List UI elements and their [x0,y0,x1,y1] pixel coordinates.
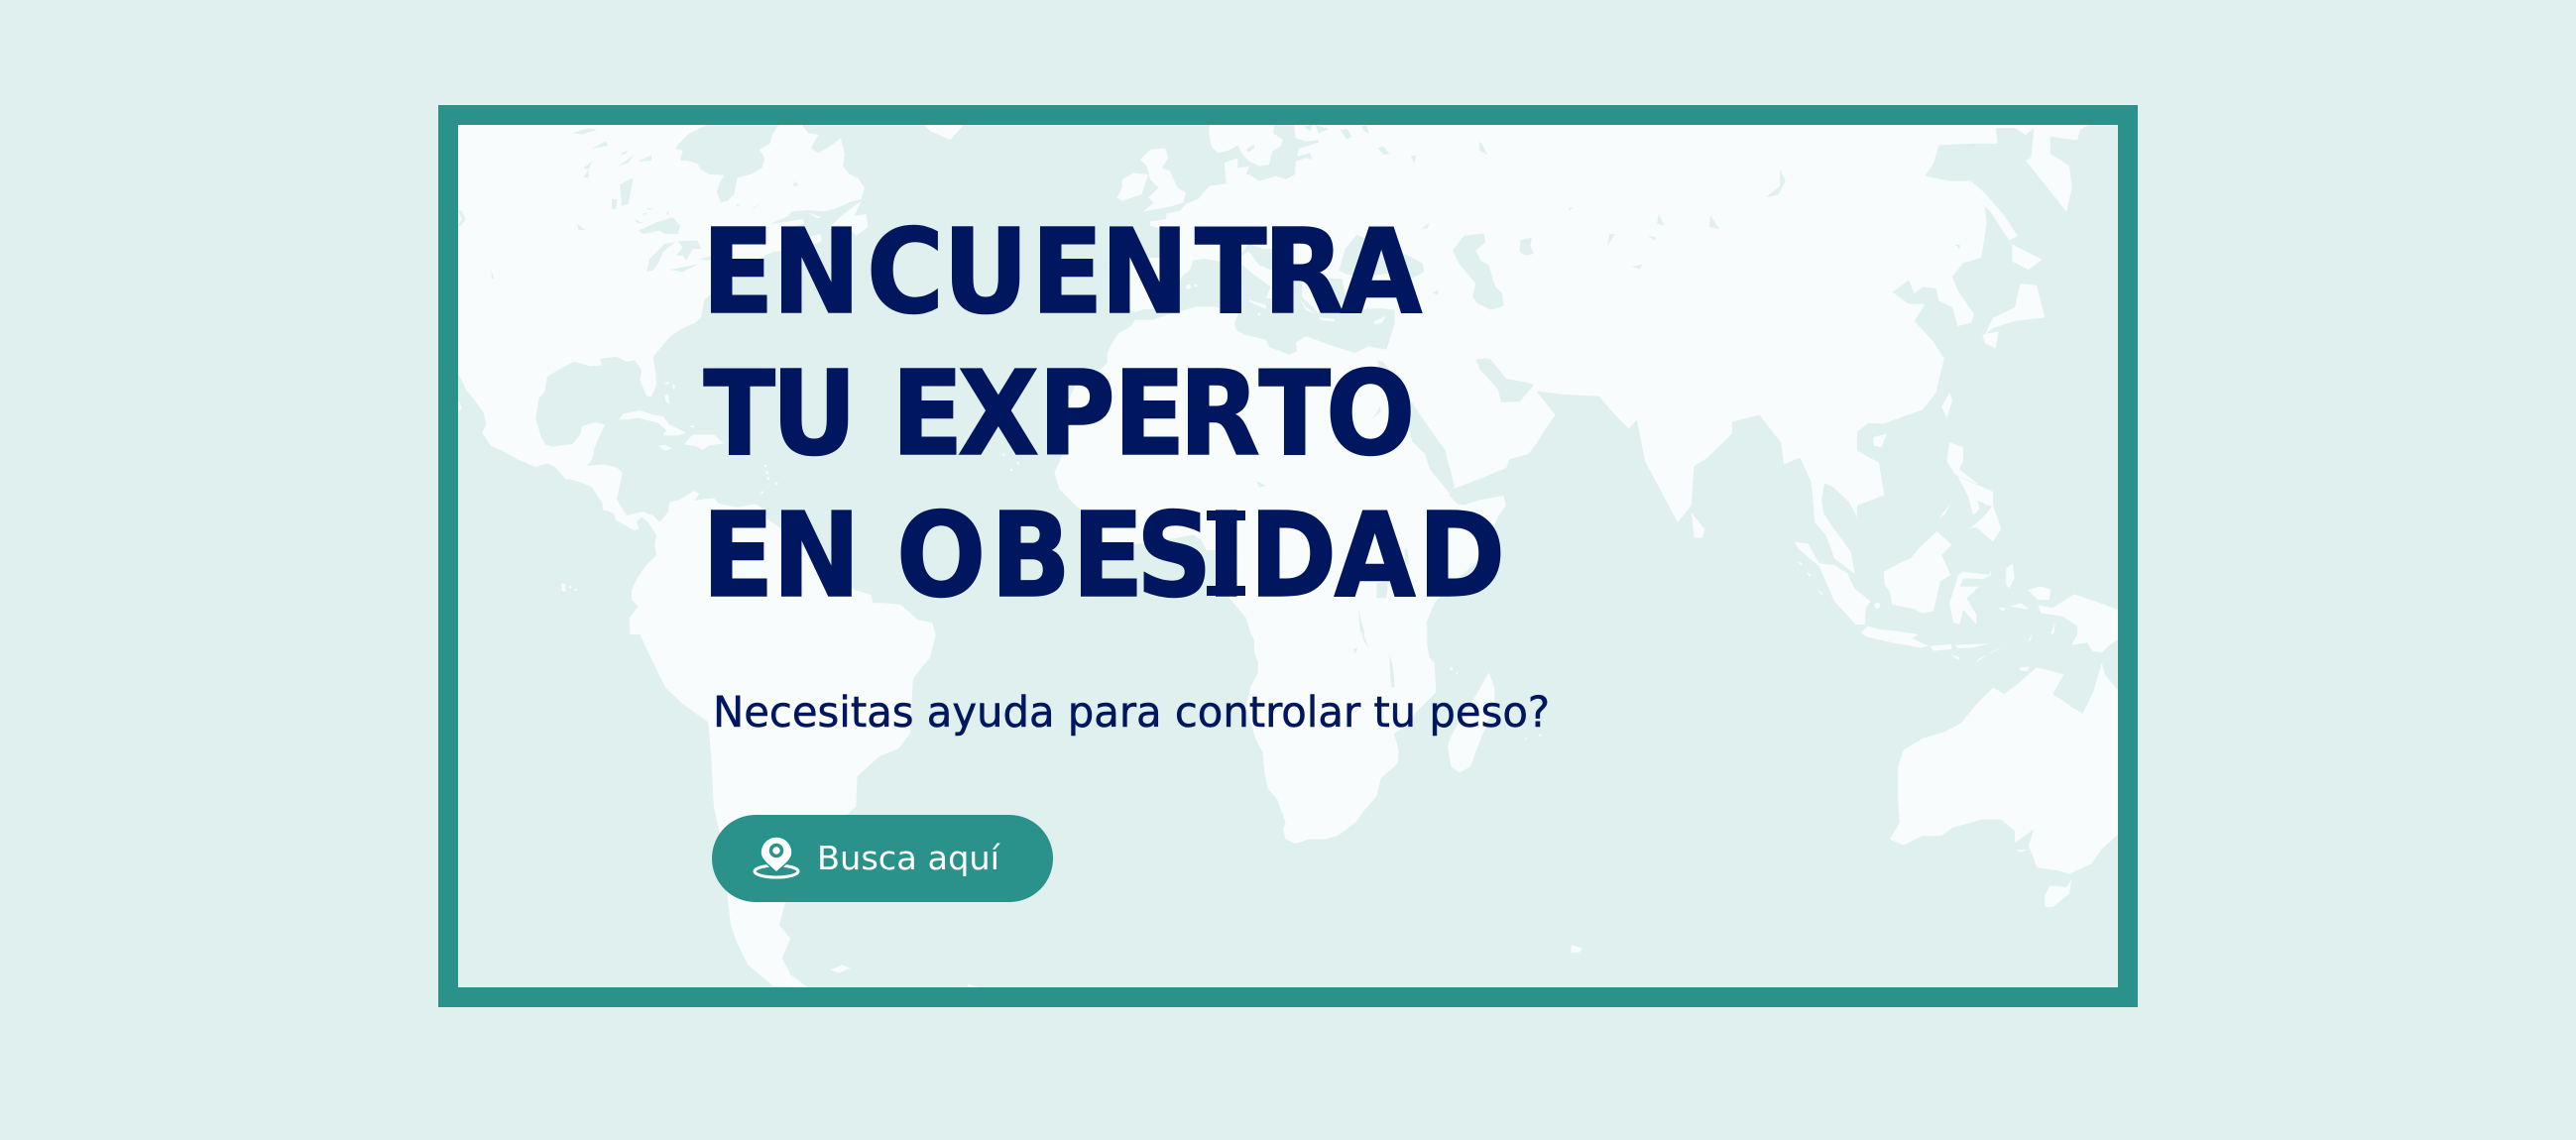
title line 3: EN OBESIDAD [702,487,1505,624]
teal frame [448,115,2128,997]
title line 1: ENCUENTRA [702,203,1422,340]
subtitle: Necesitas ayuda para controlar tu peso? [713,688,1550,738]
land: Europe and northern Africa [1091,125,1606,383]
land: Australia and Tasmania [1571,662,2118,953]
title [702,203,1505,624]
button: Busca aquí [712,815,1053,902]
button label: Busca aquí [817,839,1001,877]
land: southern South America [640,634,979,987]
land: Central America, Caribbean, northern South America [458,337,936,634]
land: Southeast Asia and New Guinea [1795,496,2118,671]
lakes of North America [458,128,798,279]
seas: Mediterranean, Black Sea, Caspian, Aral, Baltic lakes [1133,125,1574,386]
lakes of Africa [1256,406,1409,634]
icon: map pin [755,837,798,877]
land: southern Africa and Madagascar [1246,625,1542,844]
title line 2: TU EXPERTO [704,345,1415,482]
land: central Africa [1002,377,1506,634]
world map panel [458,125,2118,987]
land: North and Central America top [458,125,964,343]
land: Asia [1319,125,2088,538]
lakes of southern Africa [1353,625,1395,701]
lakes of Asia [1607,170,1960,270]
islands over the sea: Italy, Sicily, Crete, Cyprus [1186,251,1386,324]
seas: Red Sea and Persian Gulf [1377,359,1534,494]
